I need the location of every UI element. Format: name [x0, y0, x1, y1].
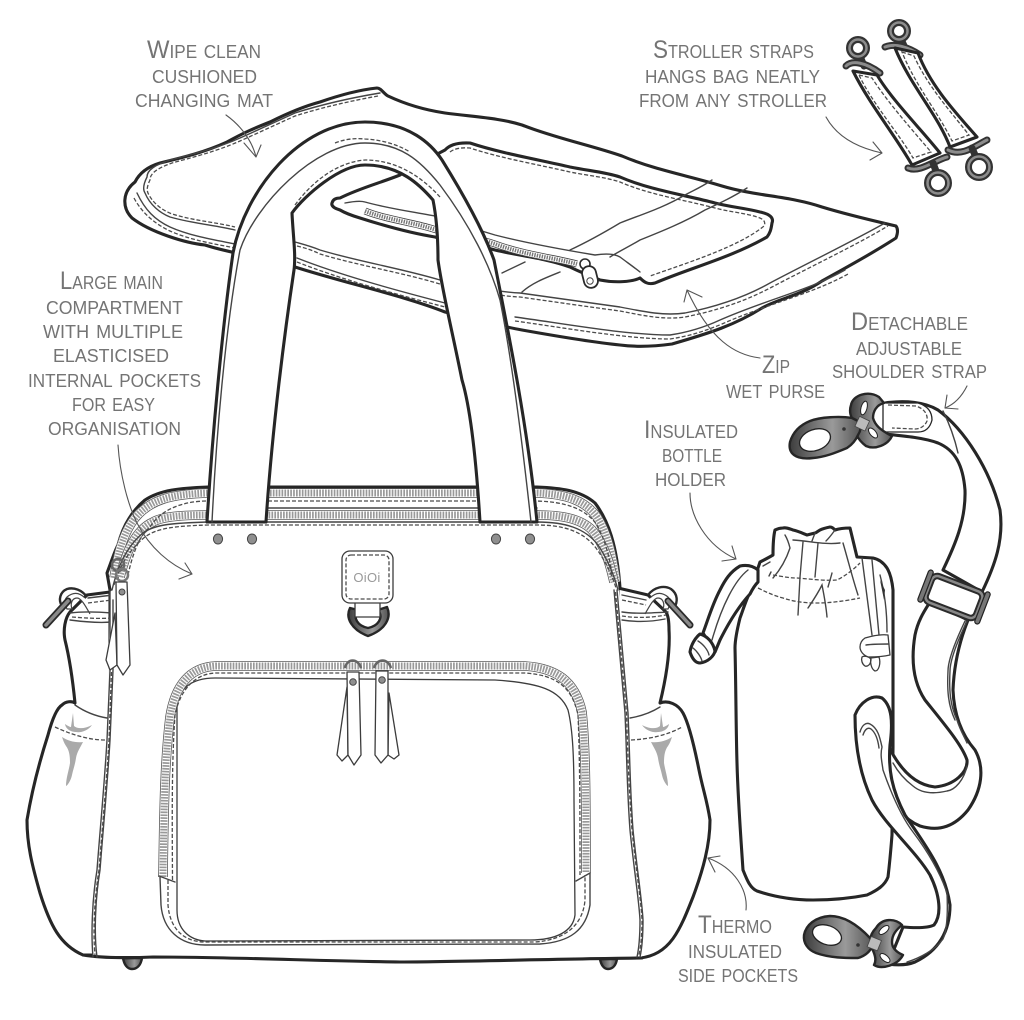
- right drawcord: [862, 558, 879, 635]
- label: thermo side pockets: insulated: [688, 936, 782, 964]
- label: shoulder strap: shoulder strap: [832, 356, 987, 384]
- bag body: [83, 487, 643, 962]
- cord knot: [690, 634, 715, 663]
- label: changing mat: Wipe clean: [147, 36, 261, 64]
- label: main compartment: [28, 267, 201, 441]
- left zip pulls: [106, 559, 130, 675]
- label: main compartment: organisation: [48, 413, 181, 441]
- thermo side pocket: right: [618, 588, 710, 958]
- top outline: [107, 487, 620, 590]
- pocket zip teeth: [365, 211, 577, 264]
- label: bottle holder: [644, 416, 738, 492]
- detachable shoulder strap: [790, 394, 1001, 967]
- arrow: bottle holder: [690, 493, 736, 561]
- label: zip wet purse: [726, 351, 825, 404]
- main zip outer: [114, 493, 616, 582]
- logo tab: OiOi: [353, 570, 381, 585]
- label: thermo side pockets: side pockets: [678, 960, 798, 988]
- arrow: stroller straps: [826, 117, 882, 160]
- label: zip wet purse: Zip: [762, 351, 790, 379]
- label: main compartment: compartment: [46, 292, 183, 320]
- bag feet: [123, 958, 617, 969]
- lower strap section with loop: [855, 697, 950, 965]
- bag handle: [207, 122, 537, 522]
- label: main compartment: for easy: [72, 389, 155, 417]
- front panel top edge: [112, 522, 618, 590]
- arrow: zip wet purse: [684, 290, 760, 358]
- label: stroller straps: [639, 36, 827, 113]
- label: changing mat: [135, 36, 273, 113]
- drawstring gathers: [773, 530, 858, 617]
- label: bottle holder: Insulated: [644, 416, 738, 444]
- stroller strap: left: [846, 40, 948, 194]
- fabric fold mark: [62, 713, 92, 786]
- mat seams: [134, 93, 888, 339]
- right knot: [860, 635, 890, 657]
- bottle body: [735, 527, 893, 900]
- upper strap section: [885, 402, 1001, 592]
- side clip: left: [46, 588, 90, 625]
- label: shoulder strap: Detachable: [851, 308, 968, 336]
- arrow: thermo side pockets: [708, 856, 746, 910]
- top swivel clip: [790, 394, 892, 458]
- d-ring: [348, 607, 389, 636]
- slider buckle: [917, 569, 991, 625]
- arrow: detachable strap: [945, 386, 967, 409]
- strap end tab: [883, 403, 932, 432]
- zip pull: [580, 259, 599, 289]
- changing mat: [125, 88, 898, 346]
- label: stroller straps: from any stroller: [639, 85, 827, 113]
- label: bottle holder: bottle: [662, 440, 722, 468]
- front zip pulls: [337, 660, 399, 765]
- arrow: changing mat: [226, 115, 261, 157]
- left drawcord: [703, 565, 758, 652]
- zip wet purse pocket: [332, 143, 772, 289]
- arrow: main compartment: [118, 445, 192, 579]
- stroller strap: right: [885, 22, 990, 178]
- bottom edge: [83, 955, 642, 962]
- bottom swivel clip: [804, 916, 903, 967]
- front pocket: [159, 660, 590, 945]
- mat outline: [125, 88, 898, 346]
- main zip inner: [120, 515, 614, 582]
- label: main compartment: elasticised: [53, 340, 169, 368]
- middle U section of strap: [878, 602, 981, 828]
- label: main compartment: internal pockets: [28, 365, 201, 393]
- label: stroller straps: Stroller straps: [653, 36, 814, 64]
- label: thermo side pockets: Thermo: [698, 911, 772, 939]
- side clip: right: [645, 587, 690, 625]
- label: shoulder strap: [832, 308, 987, 384]
- label: zip wet purse: wet purse: [726, 376, 825, 404]
- front zip: [163, 666, 586, 877]
- logo tab: [342, 551, 393, 636]
- label: bottle holder: holder: [655, 464, 726, 492]
- label: changing mat: cushioned: [152, 61, 257, 89]
- rivets: [213, 534, 535, 544]
- insulated bottle holder: [690, 527, 893, 900]
- thermo side pocket: left: [27, 592, 113, 955]
- body seams: [92, 590, 110, 957]
- label: stroller straps: hangs bag neatly: [645, 61, 820, 89]
- label: thermo side pockets: [678, 911, 798, 988]
- label: shoulder strap: adjustable: [856, 333, 962, 361]
- fabric fold mark: [642, 713, 672, 786]
- label: main compartment: Large main: [60, 267, 163, 295]
- label: main compartment: with multiple: [43, 316, 183, 344]
- label: changing mat: changing mat: [135, 85, 273, 113]
